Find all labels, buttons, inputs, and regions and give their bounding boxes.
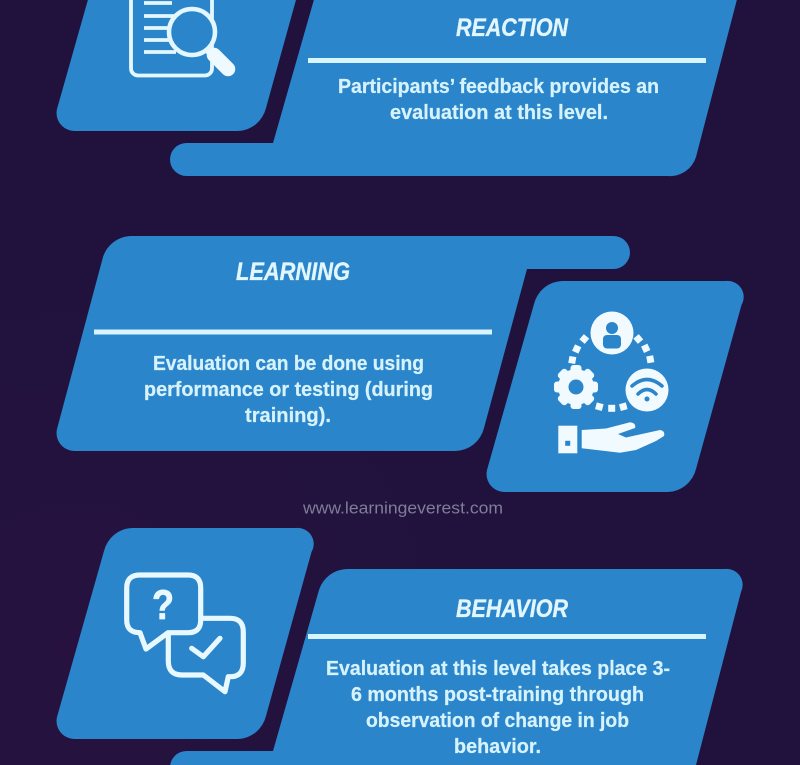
text: reaction description: Participants’ feedback provides an [338, 75, 659, 98]
text: learning description: training). [245, 404, 331, 427]
text: behavior description: behavior. [454, 735, 541, 758]
panel: behavior icon card [57, 528, 314, 739]
icon: person, gear, wifi and open hand [554, 312, 668, 453]
heading: reaction: REACTION [456, 14, 569, 42]
text: learning description: Evaluation can be done using [153, 352, 424, 375]
panel: learning icon card [487, 281, 744, 492]
heading: behavior: BEHAVIOR [456, 595, 568, 623]
panel: learning text card [57, 236, 630, 451]
text: reaction description: evaluation at this level. [390, 101, 608, 124]
icon: question and check speech bubbles [127, 575, 243, 692]
text: behavior description: Evaluation at this level takes place 3- [326, 657, 670, 680]
panel: reaction icon card [57, 0, 314, 131]
text: learning description: performance or testing (during [144, 378, 433, 401]
panel: reaction text card [170, 0, 743, 176]
text: behavior description: 6 months post-training through [351, 683, 644, 706]
icon: document with magnifying glass [131, 0, 228, 76]
panel: behavior text card [170, 569, 743, 765]
text: behavior description: observation of change in job [366, 709, 629, 732]
icon: question and check speech bubbles: ? [152, 581, 174, 628]
text: website watermark: www.learningeverest.com [302, 498, 503, 518]
text: reaction description [338, 75, 659, 124]
heading: learning: LEARNING [236, 258, 350, 286]
text: behavior description [326, 657, 670, 758]
text: learning description [144, 352, 433, 427]
